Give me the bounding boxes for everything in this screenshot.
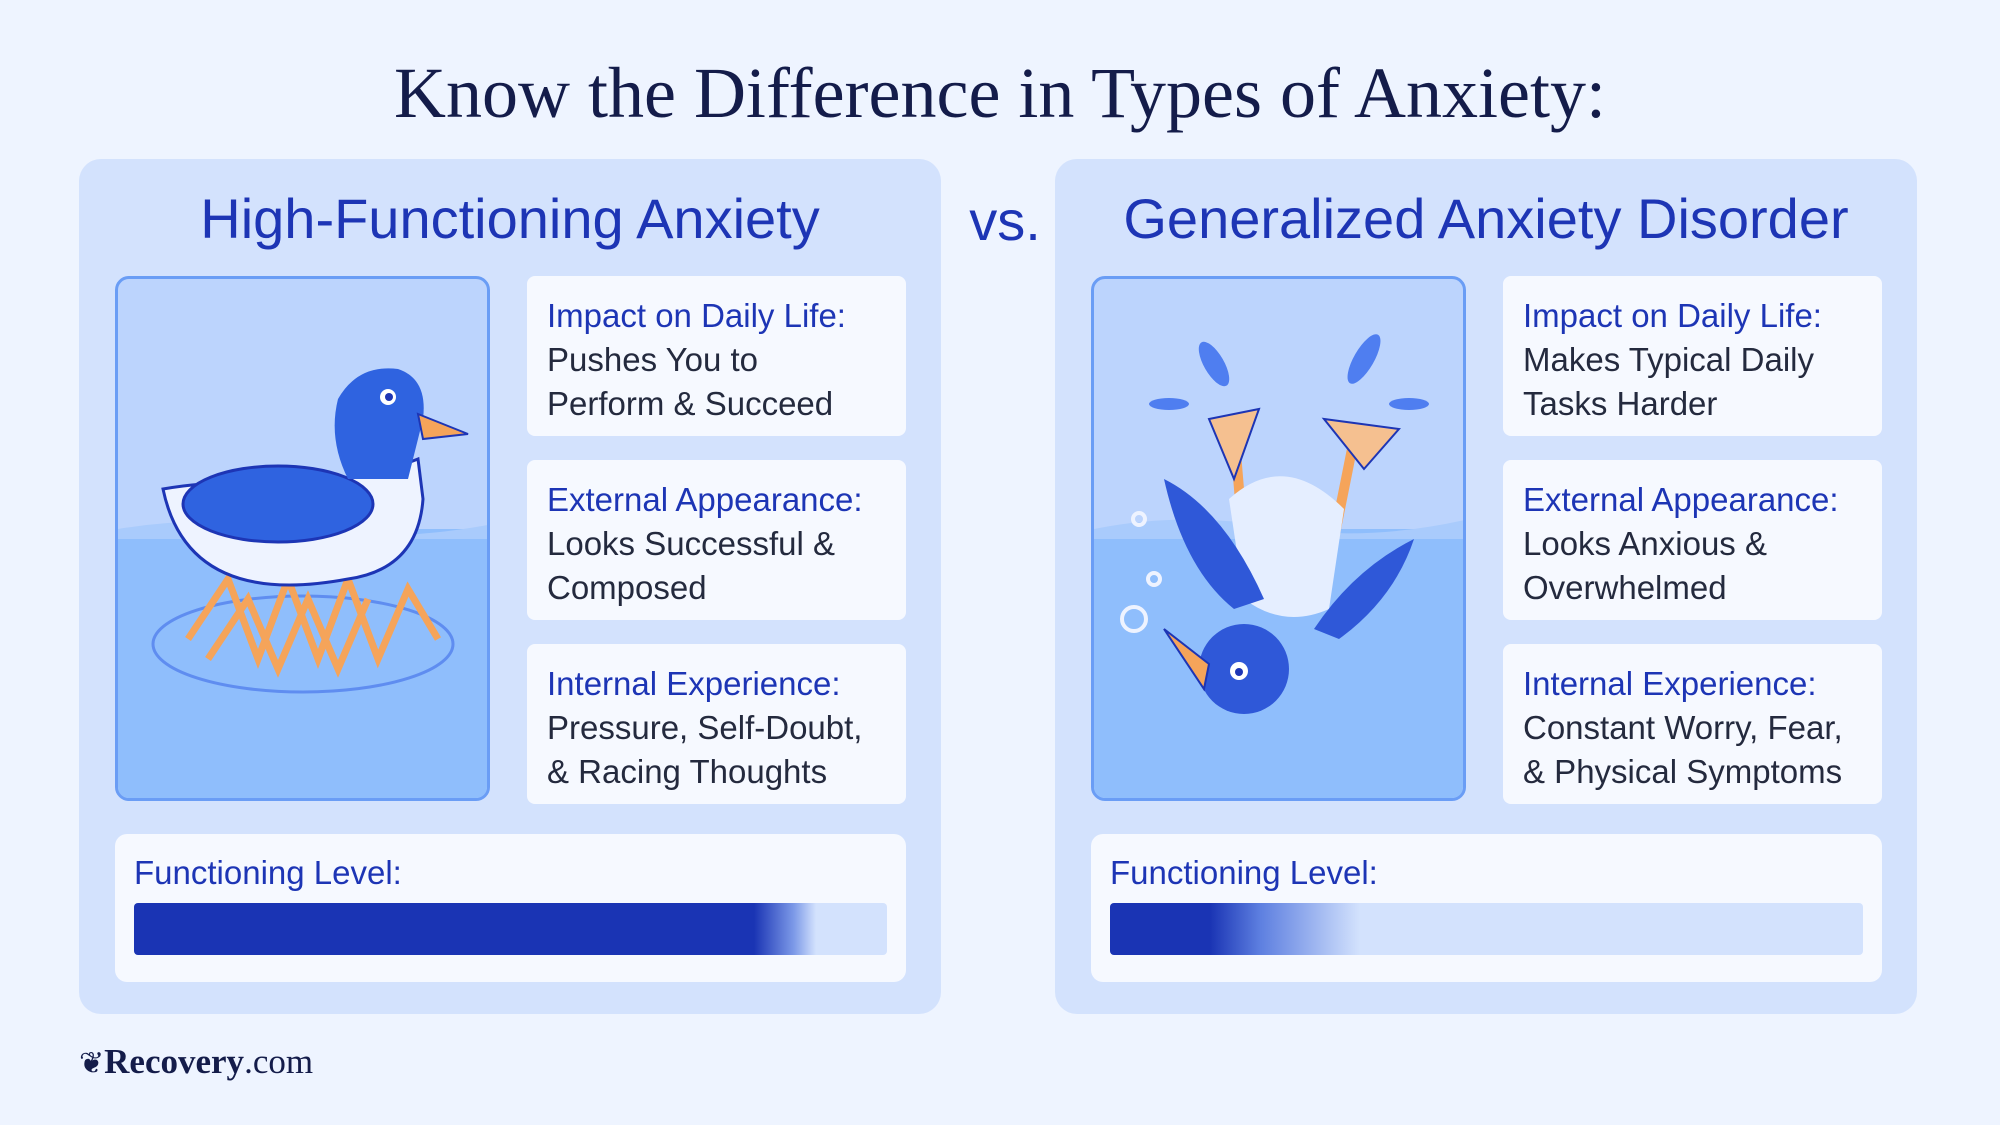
logo: ❦Recovery.com: [79, 1042, 313, 1081]
panel: high-functioning: [79, 159, 941, 1014]
card: internal experience: Constant Worry, Fear,: [1523, 709, 1843, 746]
card: impact on daily life: Pushes You to: [547, 341, 758, 378]
functioning level box: [115, 834, 906, 982]
card: impact on daily life: [1503, 276, 1882, 436]
card: internal experience: [1503, 644, 1882, 804]
card: internal experience: [527, 644, 906, 804]
panel: GAD: [1055, 159, 1917, 1014]
card: impact on daily life: Impact on Daily Life:: [547, 297, 846, 334]
card: external appearance: External Appearance:: [1523, 481, 1839, 518]
card: impact on daily life: Impact on Daily Life:: [1523, 297, 1822, 334]
functioning level box: Functioning Level:: [134, 854, 402, 891]
card: internal experience: & Racing Thoughts: [547, 753, 827, 790]
card: internal experience: & Physical Symptoms: [1523, 753, 1842, 790]
heading right: Generalized Anxiety Disorder: [1123, 187, 1849, 250]
functioning level box: [1091, 834, 1882, 982]
card: external appearance: Looks Successful &: [547, 525, 835, 562]
card: external appearance: Composed: [547, 569, 707, 606]
card: internal experience: Internal Experience:: [1523, 665, 1817, 702]
title: Know the Difference in Types of Anxiety:: [394, 53, 1606, 133]
illustration: duck: [115, 276, 490, 801]
card: impact on daily life: Makes Typical Daily: [1523, 341, 1814, 378]
bar: GAD: [1110, 903, 1863, 955]
card: external appearance: Looks Anxious &: [1523, 525, 1767, 562]
bar: high functioning: [134, 903, 887, 955]
functioning level box: Functioning Level:: [1110, 854, 1378, 891]
card: impact on daily life: [527, 276, 906, 436]
card: internal experience: Pressure, Self-Doubt,: [547, 709, 862, 746]
card: external appearance: Overwhelmed: [1523, 569, 1727, 606]
card: internal experience: Internal Experience:: [547, 665, 841, 702]
card: impact on daily life: Tasks Harder: [1523, 385, 1717, 422]
illustration: diving bird: [1091, 276, 1466, 801]
card: external appearance: External Appearance:: [547, 481, 863, 518]
card: external appearance: [1503, 460, 1882, 620]
heading left: High-Functioning Anxiety: [200, 187, 820, 250]
card: impact on daily life: Perform & Succeed: [547, 385, 833, 422]
vs label: vs.: [969, 189, 1041, 252]
card: external appearance: [527, 460, 906, 620]
